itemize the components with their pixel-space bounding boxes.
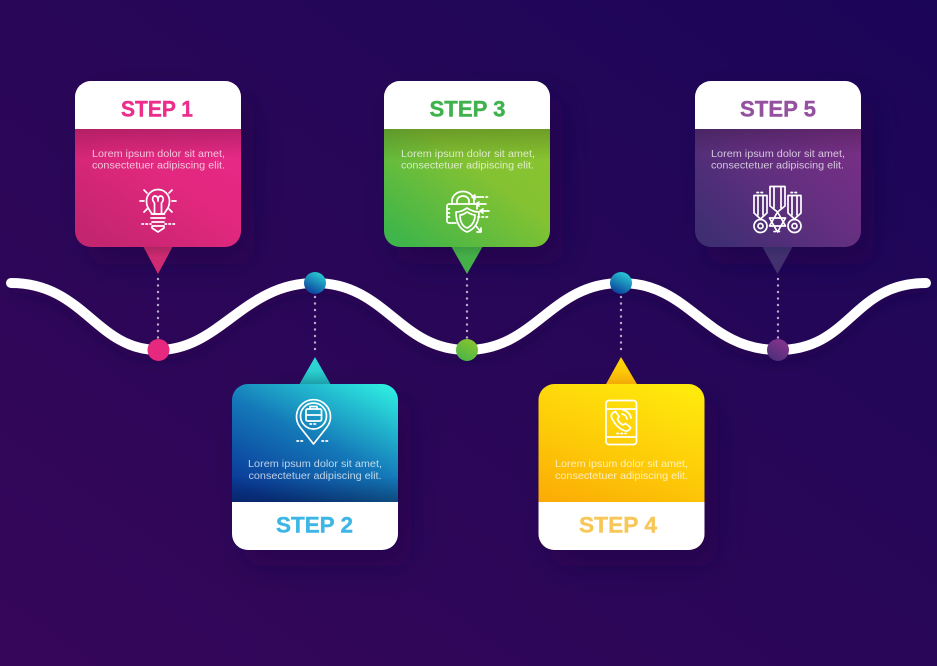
panel: step 5 [695,81,861,274]
body top shade [695,129,861,155]
icon: padlock and shield [447,192,489,232]
heading: STEP 5 [740,96,816,122]
description: Lorem ipsum dolor sit amet, [711,148,845,160]
heading: STEP 2 [276,512,353,538]
heading band [538,502,704,550]
icon: light bulb [140,190,176,232]
pointer [299,357,331,385]
description: consectetuer adipiscing elit. [92,160,225,172]
heading band [384,81,550,129]
timeline node 2 [304,272,326,294]
description: Lorem ipsum dolor sit amet, [92,148,225,160]
card body [75,81,241,247]
description: consectetuer adipiscing elit. [555,470,688,482]
description: Lorem ipsum dolor sit amet, [248,458,382,470]
timeline node 4 [610,272,632,294]
dotted connector lines [158,279,778,354]
body top shade [384,129,550,161]
pointer [451,246,483,274]
description: consectetuer adipiscing elit. [401,160,534,172]
card body [538,384,704,550]
icon: medals [754,186,801,232]
heading: STEP 1 [121,96,193,122]
pointer [606,357,638,385]
card body [695,81,861,247]
heading band [695,81,861,129]
description: Lorem ipsum dolor sit amet, [555,458,688,470]
card body [232,384,398,550]
wave timeline [11,283,926,356]
description: consectetuer adipiscing elit. [248,470,382,482]
icon: map pin with briefcase [296,400,330,444]
heading: STEP 4 [579,512,658,538]
description: Lorem ipsum dolor sit amet, [401,148,535,160]
timeline node 5 [767,339,789,361]
heading: STEP 3 [430,96,506,122]
timeline node 1 [148,339,170,361]
pointer [762,246,793,274]
heading band [232,502,398,550]
timeline node 3 [456,339,478,361]
description: consectetuer adipiscing elit. [711,160,844,172]
panel: step 1 [75,81,241,274]
panel: step 2 [232,357,398,550]
card body [384,81,550,247]
panel: step 3 [384,81,550,274]
heading band [75,81,241,129]
card shadows [88,98,874,566]
body top shade [75,129,241,159]
icon: phone call [606,400,636,444]
body bottom shade [232,476,398,502]
pointer [143,246,173,274]
panel: step 4 [538,357,704,550]
